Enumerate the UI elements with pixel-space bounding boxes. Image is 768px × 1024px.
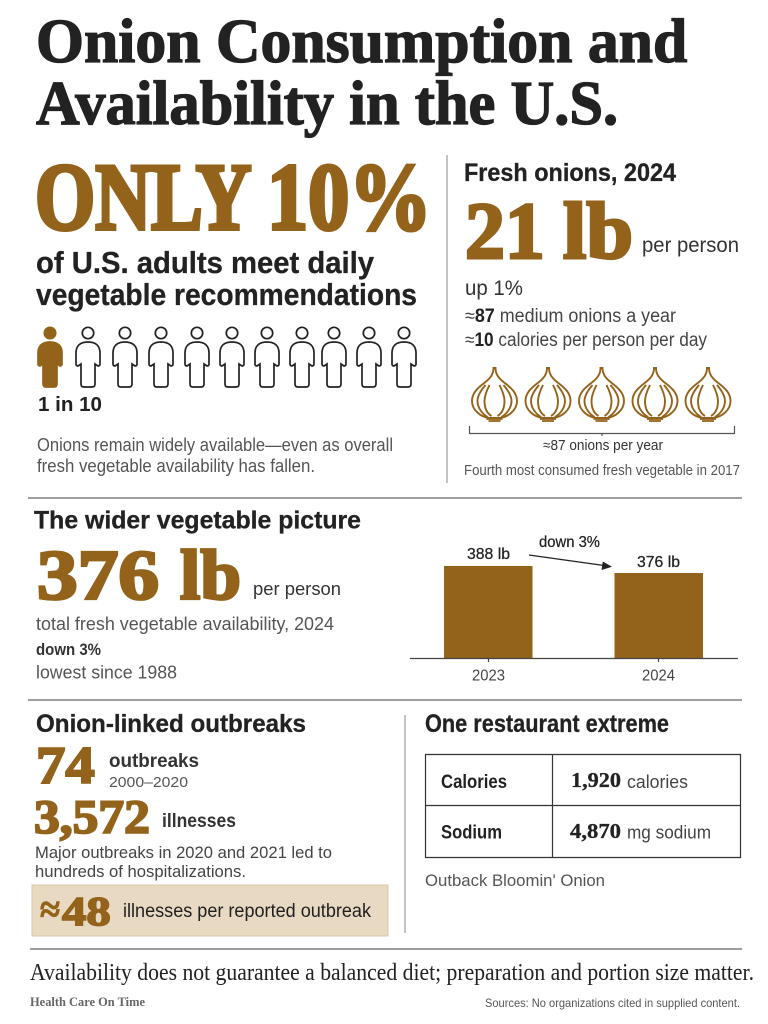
heading: Onion-linked outbreaks [36,710,306,738]
heading: One restaurant extreme [425,710,669,738]
callout: ≈ [40,889,60,931]
statistic: 3,572 illnesses [34,791,236,844]
statistic: 74 outbreaks [36,737,199,795]
bar chart [410,534,738,684]
statistic: 3,572 illnesses: illnesses [162,811,236,832]
statistic: 21 lb [465,187,633,276]
panel: onion-linked outbreaks [32,710,388,936]
table: mg sodium [627,822,711,842]
footnote: Fourth most consumed fresh vegetable in 2017 [464,463,740,479]
body text: Major outbreaks in 2020 and 2021 led to [35,843,332,862]
bar chart: 2024 [642,668,675,684]
table caption: Outback Bloomin' Onion [425,871,605,890]
detail lines [465,277,707,351]
icon row: onions [472,368,730,421]
headline statistic: ONLY [35,145,252,250]
callout: 48 [62,889,111,934]
statistic: 376 lb [37,536,241,615]
detail lines: down 3% [36,640,101,659]
bar chart: 376 lb [637,554,680,571]
arrow: decline [529,555,612,570]
statistic: 74 outbreaks: outbreaks [109,751,199,772]
brand credit: Health Care On Time [30,994,145,1009]
body text: hundreds of hospitalizations. [35,862,246,881]
bar chart: down 3% [539,534,600,551]
table: 1,920 [571,768,621,792]
body text [37,435,393,476]
statistic: 74 outbreaks: 2000–2020 [109,774,188,791]
detail lines: ≈87 medium onions a year [465,306,677,327]
panel: fresh onions 2024 [464,159,740,479]
table [426,754,740,858]
headline statistic: 10% [267,146,432,250]
detail lines: ≈10 calories per person per day [465,330,707,351]
detail lines: lowest since 1988 [36,662,177,682]
body text [35,843,332,881]
subheading [36,245,417,312]
heading: The wider vegetable picture [34,506,361,534]
bar chart: 388 lb [467,546,510,563]
title: Availability in the U.S. [36,69,618,138]
statistic: 74 outbreaks: 74 [36,737,95,795]
statistic: 3,572 illnesses: 3,572 [34,791,150,844]
per person label: per person [642,234,739,257]
panel: one restaurant extreme [425,710,740,890]
title [36,8,687,138]
detail lines: up 1% [465,277,523,300]
per person label: per person [253,578,341,599]
bracket label: ≈87 onions per year [543,438,663,454]
subheading: vegetable recommendations [36,277,417,312]
panel: wider vegetable picture [34,506,738,684]
table: calories [627,772,688,792]
table: Calories [441,772,507,793]
body text: fresh vegetable availability has fallen. [37,456,315,476]
table: Sodium [441,822,502,844]
callout [32,885,388,936]
statistic: 21 lb: lb [563,187,633,276]
title: Onion Consumption and [36,8,687,76]
statistic: 21 lb: 21 [465,188,545,276]
detail lines: total fresh vegetable availability, 2024 [36,613,334,634]
table: 4,870 [570,819,621,843]
heading: Fresh onions, 2024 [464,159,676,187]
bracket [470,426,734,436]
sources: Sources: No organizations cited in supplied content. [485,996,740,1010]
icon row: 1 in 10 people [38,327,416,387]
bar chart: 2023 [472,668,505,684]
panel: only 10 percent [35,145,432,476]
statistic: 376 lb: lb [180,536,241,615]
body text: Onions remain widely available—even as overall [37,435,393,455]
headline statistic [35,145,432,250]
statistic: 376 lb: 376 [37,536,159,615]
subheading: of U.S. adults meet daily [36,245,375,280]
detail lines [36,613,334,682]
callout: illnesses per reported outbreak [123,901,371,922]
1 in 10 label: 1 in 10 [38,394,102,416]
